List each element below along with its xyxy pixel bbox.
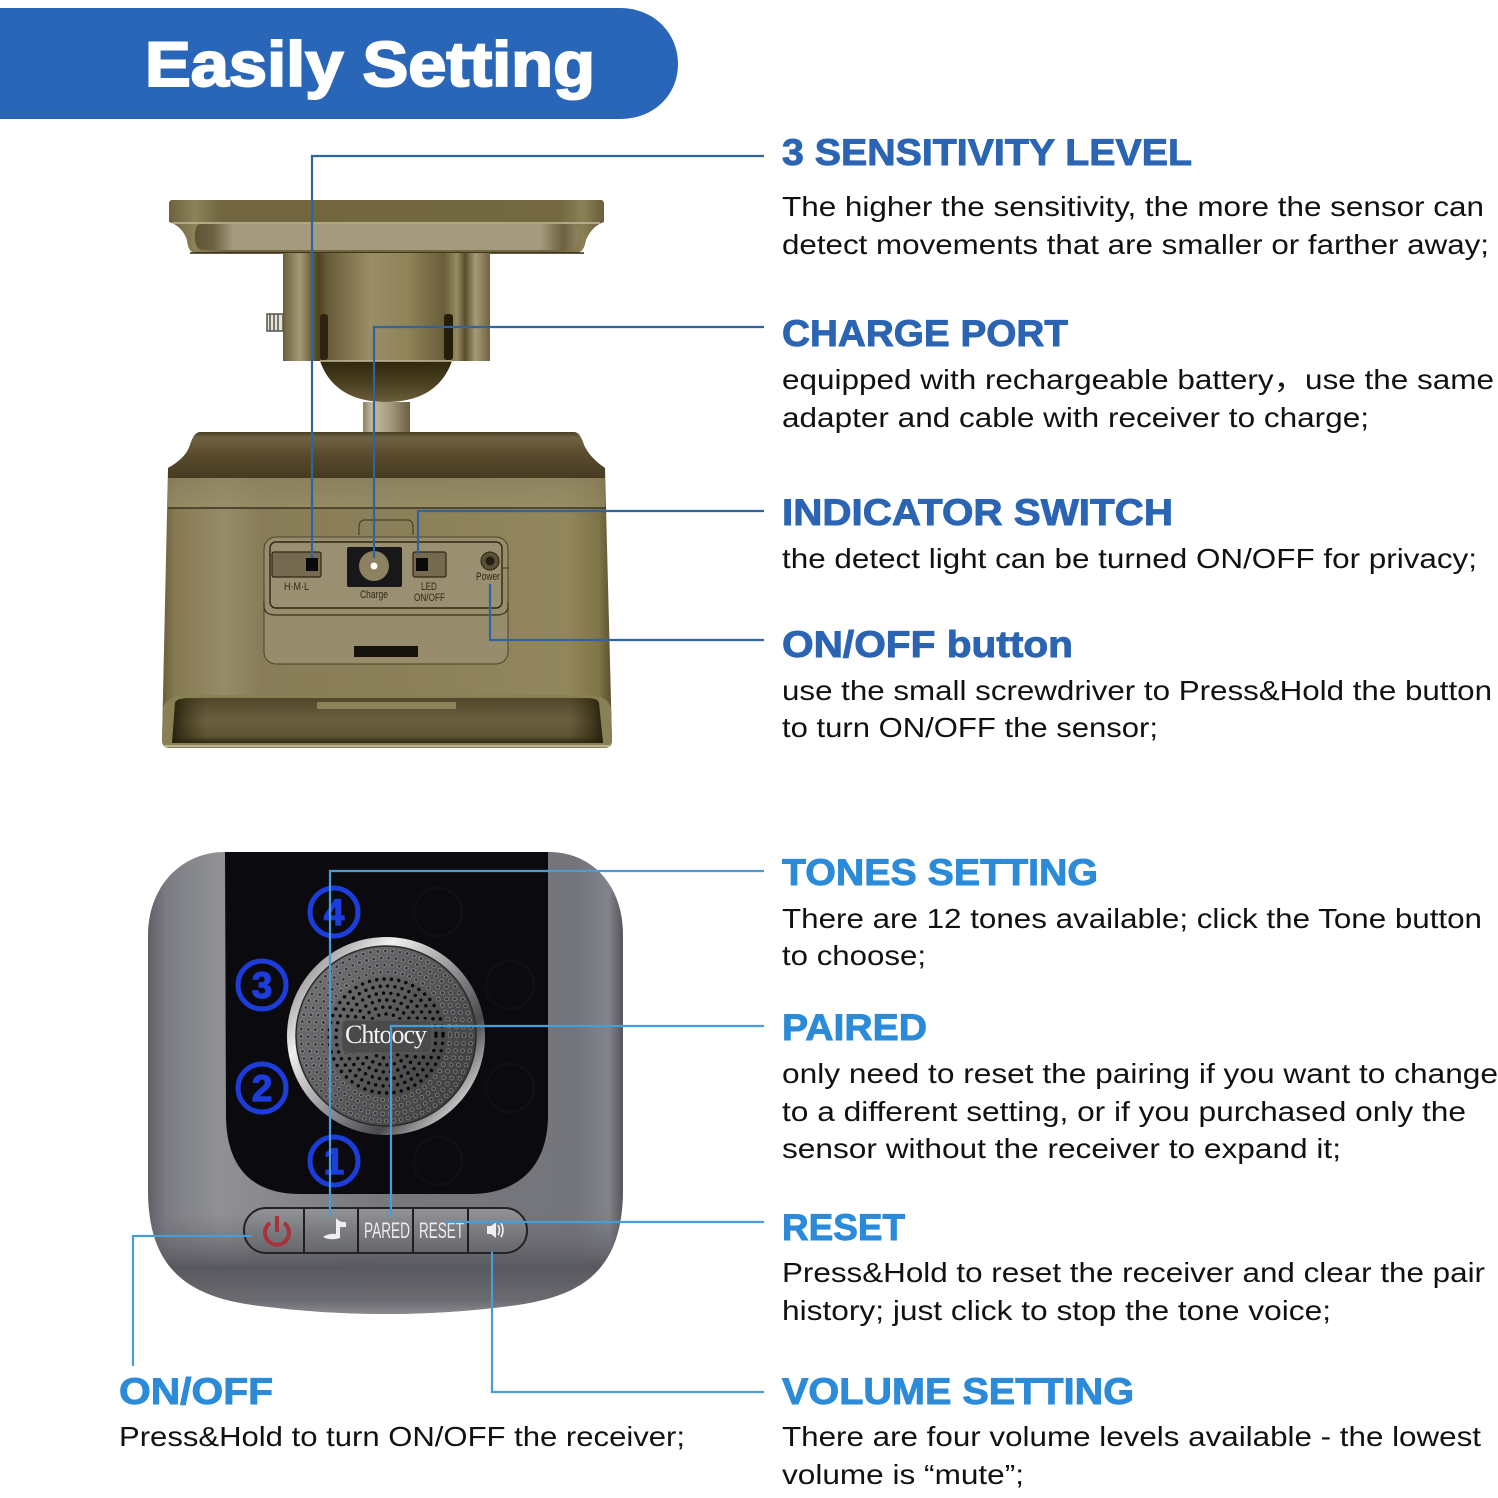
description: Press&Hold to turn ON/OFF the receiver; <box>119 1421 685 1452</box>
section: on/off button: ON/OFF button <box>782 624 1073 665</box>
ON/OFF label: ON/OFF <box>414 592 445 604</box>
description: to choose; <box>782 940 926 971</box>
section: reset: RESET <box>782 1207 905 1248</box>
section: tones setting <box>782 852 1482 971</box>
H-M-L switch <box>272 552 321 577</box>
callout lines: sensor <box>312 156 764 640</box>
section: charge port: CHARGE PORT <box>782 313 1068 354</box>
section: tones setting: TONES SETTING <box>782 852 1098 893</box>
description: There are 12 tones available; click the Tone button <box>782 903 1482 934</box>
indicator 1: 1 <box>324 1141 344 1182</box>
screw <box>267 314 283 331</box>
charge label: Charge <box>360 589 388 601</box>
description <box>782 1421 1481 1490</box>
tone icon <box>323 1218 346 1239</box>
section: 3 sensitivity level <box>782 132 1489 260</box>
power icon <box>265 1216 289 1245</box>
description: the detect light can be turned ON/OFF for privacy; <box>782 543 1477 574</box>
description <box>782 1257 1485 1326</box>
section: indicator switch: INDICATOR SWITCH <box>782 492 1173 533</box>
sensor device <box>162 200 612 748</box>
receiver body <box>148 852 623 1314</box>
battery tab <box>359 520 413 535</box>
mounting plate <box>169 200 604 253</box>
pared label: PARED <box>364 1218 410 1243</box>
section: on/off <box>119 1371 685 1452</box>
unlit indicators <box>414 888 534 1185</box>
description: to a different setting, or if you purchased only the <box>782 1096 1466 1127</box>
indicator 3 <box>238 961 286 1009</box>
power label: Power <box>476 571 500 583</box>
callout lines: receiver <box>133 871 764 1392</box>
charge port <box>347 547 402 587</box>
description: history; just click to stop the tone voice; <box>782 1295 1331 1326</box>
indicator 2 <box>238 1064 286 1112</box>
bottom opening <box>162 695 612 748</box>
speaker <box>287 937 485 1135</box>
section: indicator switch <box>782 492 1477 574</box>
description <box>782 191 1489 260</box>
section: volume setting <box>782 1371 1481 1490</box>
description: detect movements that are smaller or farther away; <box>782 229 1489 260</box>
description: adapter and cable with receiver to charge; <box>782 402 1369 433</box>
section: on/off: ON/OFF <box>119 1371 273 1412</box>
section: paired: PAIRED <box>782 1007 927 1048</box>
indicator 3: 3 <box>252 965 272 1006</box>
description: The higher the sensitivity, the more the sensor can <box>782 191 1484 222</box>
indicator 4: 4 <box>324 892 345 933</box>
indicator 2: 2 <box>252 1068 272 1109</box>
main body <box>162 432 612 748</box>
H-M-L label: H·M·L <box>284 581 309 593</box>
volume icon <box>487 1222 503 1238</box>
LED switch <box>413 552 446 577</box>
receiver device <box>148 852 623 1314</box>
control panel <box>264 537 508 664</box>
button bar <box>244 1208 527 1253</box>
description: sensor without the receiver to expand it; <box>782 1133 1341 1164</box>
description: to turn ON/OFF the sensor; <box>782 712 1158 743</box>
indicator 4 <box>310 888 358 936</box>
description <box>782 675 1492 743</box>
section: 3 sensitivity level: 3 SENSITIVITY LEVEL <box>782 132 1192 173</box>
description <box>782 364 1494 433</box>
description: use the small screwdriver to Press&Hold the button <box>782 675 1492 706</box>
black panel <box>225 852 548 1194</box>
section: reset <box>782 1207 1485 1326</box>
description <box>782 903 1482 971</box>
description: There are four volume levels available - the lowest <box>782 1421 1481 1452</box>
power button <box>481 552 499 570</box>
LED label: LED <box>421 581 437 593</box>
description: Press&Hold to reset the receiver and clear the pair <box>782 1257 1485 1288</box>
section: on/off button <box>782 624 1492 743</box>
description <box>782 1058 1498 1164</box>
slot <box>354 646 418 657</box>
section: volume setting: VOLUME SETTING <box>782 1371 1134 1412</box>
description: volume is “mute”; <box>782 1459 1024 1490</box>
ball joint <box>320 361 452 402</box>
neck <box>363 402 410 433</box>
section: charge port <box>782 313 1494 433</box>
mount block <box>283 253 490 361</box>
description: only need to reset the pairing if you want to change <box>782 1058 1498 1089</box>
section: paired <box>782 1007 1498 1164</box>
reset label: RESET <box>419 1218 464 1243</box>
title banner <box>0 8 678 119</box>
description: equipped with rechargeable battery，use the same <box>782 364 1494 395</box>
indicator 1 <box>310 1137 358 1185</box>
title: Easily Setting <box>145 30 595 100</box>
brand name: Chtoocy <box>345 1020 427 1049</box>
